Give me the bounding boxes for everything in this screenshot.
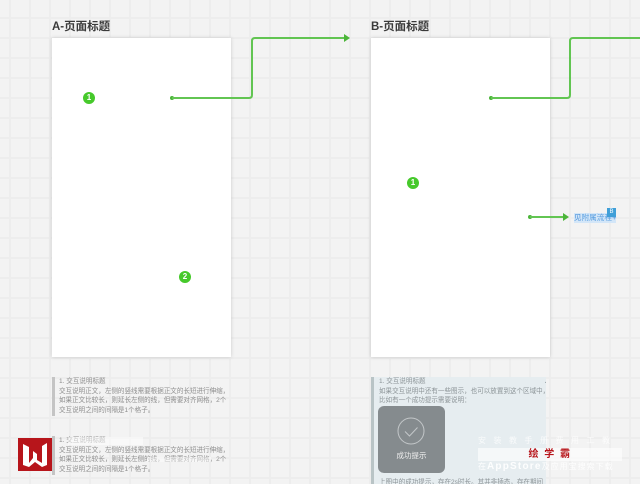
icon: marker 2 on page A: 2 — [183, 272, 187, 281]
text block: note A2: 如果正文比较长，则延长左侧的线，但需要对齐网格，2个 — [59, 456, 226, 463]
panel: note B with success toast — [371, 377, 546, 484]
icon: check circle — [398, 418, 424, 444]
link text: 见附属流程+ — [574, 213, 616, 222]
text: note B intro — [379, 377, 546, 404]
watermark: white smudge over note A2 heading — [68, 437, 143, 445]
text block: note A2 — [52, 436, 242, 475]
icon: collapse caret — [545, 380, 549, 383]
watermark: red brand banner — [478, 448, 622, 461]
toast label: 成功提示 — [396, 451, 426, 460]
watermark: red brand banner: 绘 学 霸 — [528, 449, 572, 460]
panel: page A screen — [52, 38, 231, 357]
text block: note A1: 1. 交互说明标题 — [59, 378, 106, 385]
logo: red W badge — [18, 438, 52, 471]
icon: flow link tag: B — [609, 209, 614, 215]
heading: page A title: A-页面标题 — [52, 20, 110, 32]
icon: marker 1 on page A: 1 — [87, 93, 91, 102]
text block: note A1: 如果正文比较长，则延长左侧的线，但需要对齐网格，2个 — [59, 397, 226, 404]
text: note B intro: 1. 交互说明标题 — [379, 378, 426, 385]
icon: marker 1 on page A — [83, 92, 95, 104]
text block: note A1: 交互说明正文，左侧的竖线需要根据正文的长短进行伸缩， — [59, 388, 229, 395]
text block: note A1 — [52, 377, 242, 416]
icon: W mark — [23, 443, 47, 467]
text: note B intro: 比如有一个成功提示需要说明： — [379, 397, 471, 404]
panel: success toast — [378, 406, 445, 473]
icon: marker 2 on page A — [179, 271, 191, 283]
icon: flow link tag — [607, 208, 616, 217]
text block: note A1: 交互说明之间的间隔是1个格子。 — [59, 407, 154, 414]
panel: page B screen — [371, 38, 550, 357]
watermark: promo line top: 安装教手册费用工教 — [478, 436, 618, 445]
text block: note A2: 1. 交互说明标题 — [59, 437, 106, 444]
text block: note A2: 交互说明正文，左侧的竖线需要根据正文的长短进行伸缩， — [59, 447, 229, 454]
icon: marker 1 on page B: 1 — [411, 178, 415, 187]
text block: note A2: 交互说明之间的间隔是1个格子。 — [59, 466, 154, 473]
text: note B intro: 如果交互说明中还有一些图示，也可以放置到这个区域中， — [379, 388, 546, 395]
heading: page B title: B-页面标题 — [371, 20, 429, 32]
watermark: white smudge over note A2 body — [147, 457, 211, 462]
icon: marker 1 on page B — [407, 177, 419, 189]
watermark: App Store line: 在AppStore及应用宝搜索下载 — [478, 461, 614, 472]
